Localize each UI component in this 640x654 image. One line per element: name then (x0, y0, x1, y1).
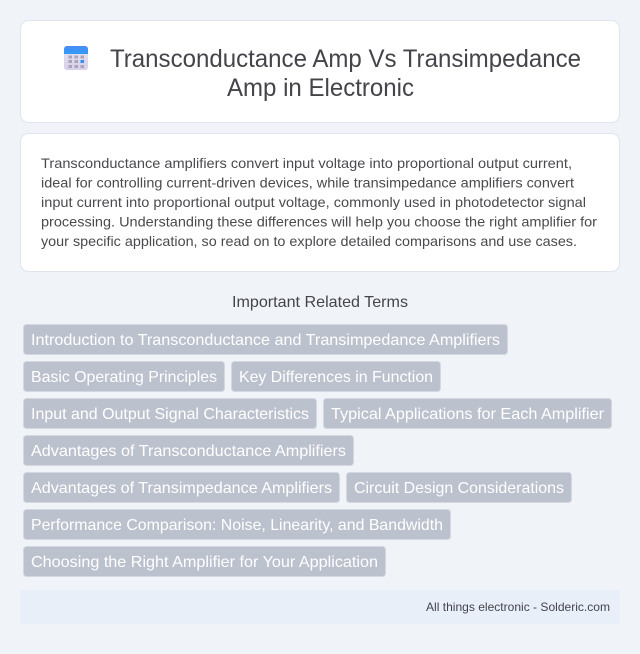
title: Amp in Electronic (227, 74, 414, 102)
panel: introduction: ideal for controlling current-driven devices, while transimpedance amplifiers convert (41, 174, 574, 190)
tag: transconductance advantages (24, 436, 354, 466)
heading: important related terms: Important Related Terms (232, 294, 408, 311)
tag: introduction (24, 324, 508, 354)
panel: introduction: input current into proportional output voltage, commonly used in photodetector signal (41, 194, 586, 210)
tag: typical applications (324, 398, 612, 428)
tag: transconductance advantages: Advantages of Transconductance Amplifiers (31, 443, 346, 460)
panel: introduction: Transconductance amplifiers convert input voltage into proportional output current, (41, 155, 572, 171)
title (110, 45, 581, 102)
tag: key differences (232, 362, 440, 392)
tag: basic operating principles: Basic Operating Principles (31, 369, 217, 386)
tag: signal characteristics: Input and Output Signal Characteristics (31, 406, 309, 423)
tag: key differences: Key Differences in Function (239, 369, 433, 386)
tag: introduction: Introduction to Transconductance and Transimpedance Amplifiers (31, 332, 500, 349)
tag: circuit design: Circuit Design Considerations (354, 480, 564, 497)
panel: introduction: your specific application, so read on to explore detailed comparisons and use cases. (41, 233, 577, 249)
footer: All things electronic - Solderic.com (426, 600, 610, 614)
panel: header (20, 20, 620, 122)
tag: transimpedance advantages (24, 472, 340, 502)
title: Transconductance Amp Vs Transimpedance (110, 45, 581, 73)
footer (20, 590, 620, 624)
tag: performance comparison (24, 510, 450, 540)
term tags (24, 324, 612, 576)
tag: choosing amplifier: Choosing the Right Amplifier for Your Application (31, 554, 378, 571)
tag: basic operating principles (24, 362, 224, 392)
panel: introduction (20, 134, 620, 272)
tag: typical applications: Typical Applications for Each Amplifier (331, 406, 605, 423)
tag: signal characteristics (24, 398, 316, 428)
tag: circuit design (346, 472, 572, 502)
tag: performance comparison: Performance Comparison: Noise, Linearity, and Bandwidth (31, 517, 443, 534)
tag: choosing amplifier (24, 546, 386, 576)
icon: calendar grid (64, 46, 88, 70)
panel: introduction: processing. Understanding these differences will help you choose the right amplifier for (41, 214, 597, 230)
tag: transimpedance advantages: Advantages of Transimpedance Amplifiers (31, 480, 332, 497)
